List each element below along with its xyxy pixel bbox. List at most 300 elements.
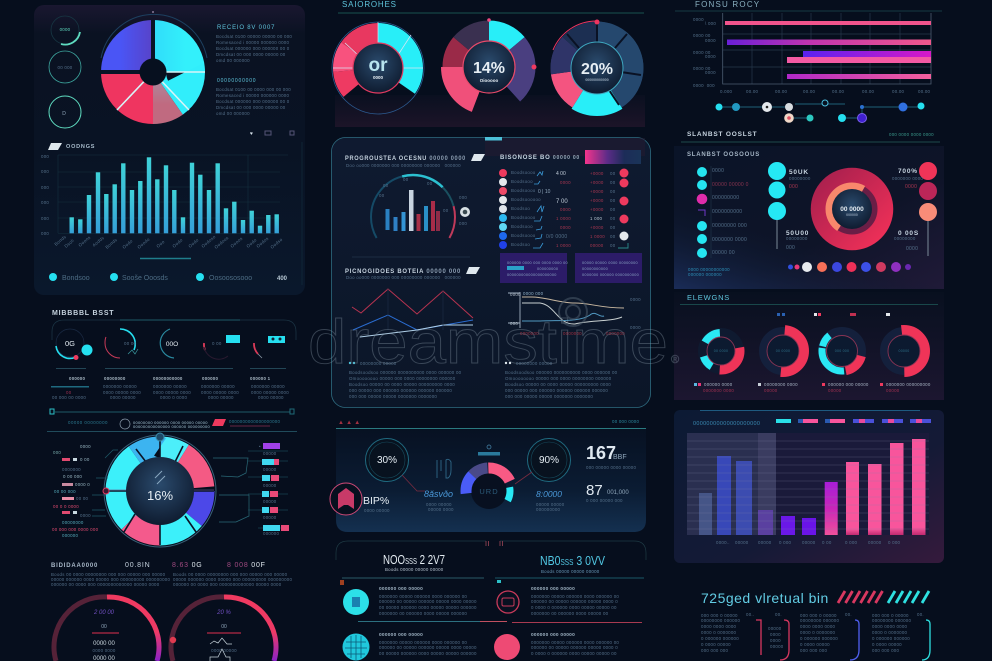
donut: 20%: 000000000000 (585, 78, 609, 82)
text block: Bocdsat 0100 00 0000 000 00 000 (216, 87, 291, 92)
donut: or (332, 22, 424, 114)
right labels: 00000 (263, 451, 277, 456)
panel: vertical bar chart (674, 410, 944, 563)
chart axis labels: 0000 000 (523, 291, 544, 296)
x labels: 00000 (735, 540, 749, 545)
teal bar chart: Bonds (104, 237, 119, 250)
x labels: 00000 (758, 540, 772, 545)
item 4: 000000 00 00000 000000 00000 0000 0 (531, 645, 618, 650)
text columns: 00. (917, 612, 924, 617)
text block: Dmcdsat 00 000 0000 00000 00 (216, 105, 286, 110)
stats: 001,000 (607, 490, 629, 496)
donut: 20%: 20% (581, 61, 613, 78)
teal bar chart: Bonds (53, 234, 68, 247)
left labels: 0 00 (80, 457, 90, 462)
cyan column: 000 (786, 245, 795, 251)
legend row: 400 (277, 276, 288, 282)
donut URD: URD (479, 487, 499, 496)
list of metrics: +0000 (590, 225, 604, 230)
list of metrics: +0000 (590, 207, 604, 212)
gauge captions (51, 368, 289, 400)
item 1: 000000 000 00000 (379, 586, 423, 592)
stats: 8:0000 (536, 489, 562, 499)
list of metrics: Boodsoooo (511, 233, 536, 238)
chart axis labels: 0000 (630, 297, 641, 302)
panel: horizontal bars: 00.00 (746, 89, 759, 94)
right column: 0000000 0000 (892, 176, 923, 181)
left labels: 0000000 (62, 467, 81, 472)
right column: 00000000 (894, 236, 916, 241)
plot background (687, 433, 929, 535)
left labels: 0000 0 (75, 482, 90, 487)
band: donut row background (335, 95, 645, 127)
arc gauge left: 2 00 00 (93, 610, 115, 616)
item 2: 0000000 00000 000000 0000 000000 00 (531, 594, 619, 599)
semicircle gauge: 00 (443, 208, 449, 213)
teal bar chart: 000 (41, 216, 49, 221)
panel: pie and bar dashboard (34, 5, 305, 295)
right column: 700% (898, 168, 918, 175)
chart axis labels: 0000000 (520, 331, 539, 336)
heading right: NB0SSS 3 0VV (540, 553, 605, 568)
stats: 000000000 (536, 507, 561, 512)
left labels (52, 444, 118, 538)
right labels: • (259, 444, 261, 449)
list of metrics: 4 00 (556, 171, 566, 177)
ring gauges: D (62, 111, 66, 117)
donut captions: 000000 0000 (704, 382, 733, 387)
legend row: Sooše Ooosds (122, 275, 168, 282)
text pair: 8.63 0G (172, 562, 203, 569)
icon: cutlery (437, 459, 451, 478)
ring gauges: 00 000 (58, 65, 73, 70)
list of metrics: Boodsoo (511, 206, 530, 211)
text block: omd 00 000000 (216, 58, 250, 63)
list of metrics: 00 (610, 225, 616, 230)
panel: bottom center KPI: 00 000 0000 (612, 419, 639, 424)
gauge captions: 000000 (202, 376, 218, 381)
list of metrics: +0000 (590, 171, 604, 176)
teal bar chart: Oodo (171, 237, 184, 249)
footer text left: 000 000 00000 00000 0000000 0000000 (349, 394, 437, 399)
gauge captions: 0000000 00000 (251, 384, 285, 389)
teal bar chart: Oodo (245, 237, 258, 249)
left labels: 00 000 000 0000 000 (52, 527, 99, 532)
arc gauge right: 20 % (216, 610, 231, 616)
x labels: 00000 (802, 540, 816, 545)
list of metrics: 00 (610, 180, 616, 185)
panel: horizontal bars: 0000 (705, 54, 716, 59)
big donut: 00 0000 (840, 206, 864, 213)
teal bar chart: Oodo (121, 238, 134, 250)
heading: top center: SAIOROHES (342, 0, 397, 9)
watermark: dreamstime (308, 308, 668, 377)
text pair: BIDIDAA0000 (51, 563, 98, 569)
gauge captions: 0000 00000 0000 (153, 390, 191, 395)
gauge captions: 000000 1 (250, 376, 271, 381)
panel: horizontal bars: 0000 (693, 17, 704, 22)
purple callouts: 000000000000000000000 (507, 273, 557, 277)
gauge captions: 0000 00000 (110, 395, 136, 400)
left labels: 000 (53, 450, 61, 455)
panel: horizontal bars: 0000 00 (693, 50, 711, 55)
item 2: 0000000 00 000000 0000 00000 00 (531, 611, 609, 616)
panel: lower left gauges: 0 00 (212, 341, 222, 346)
left legend: 00000 00 (712, 250, 735, 256)
donut captions (694, 382, 931, 393)
left legend: 000000000 (712, 195, 739, 201)
text block: Bocdsat 000000 000 000000 00 0 (216, 99, 290, 104)
teal bar chart: Oooos (229, 235, 244, 249)
right labels: 000000 (263, 531, 279, 536)
panel: four donuts: ELEWGNS (687, 293, 730, 302)
ring gauges (49, 16, 81, 128)
text pair: 000000 00 0000 000 0000000000000 00000 0000 (51, 582, 160, 587)
watermark: ® (671, 354, 679, 366)
cyan column: 00000000 (789, 176, 811, 181)
text block (216, 25, 292, 116)
small icons (250, 131, 294, 137)
divider with markers: 000000000000000 000000 000000000 (133, 424, 210, 429)
list of metrics: 0000 (560, 207, 571, 212)
item 4: 0 0000 0 000000 0000 00000 00000 00 (531, 651, 617, 656)
list of metrics: 00 (610, 207, 616, 212)
panel: bottom center split (336, 541, 646, 660)
footer text left: Omoooooooo 00000 000 0000 00000000 000000 (349, 376, 456, 381)
left legend: 00000 00000 0 (712, 182, 749, 188)
item 4 (494, 632, 619, 660)
heading left: NOOSSS 2 2V7 (383, 552, 445, 567)
right column: 0000 (906, 246, 918, 252)
text columns: 0000 0 0000000 (872, 630, 908, 635)
item 1 (343, 586, 477, 616)
stats (424, 443, 636, 512)
text pair: Boods 00 0000 00000000 000 000 00000 000 00000 (173, 572, 288, 577)
panel: horizontal bars: 0000 (705, 70, 716, 75)
text columns: 000 000 0 00000 (872, 613, 909, 618)
panel: horizontal bars: FONSU ROCY (695, 0, 760, 9)
footer text left (349, 361, 462, 399)
heading left (340, 552, 484, 585)
gauge captions: 0000 0 0000 (160, 395, 187, 400)
bars (699, 439, 926, 535)
teal bar chart: Oodos (255, 235, 270, 249)
item 4: 000000 000 00000 (531, 632, 575, 638)
divider with markers (47, 409, 297, 432)
x labels: 0 000 (888, 540, 901, 545)
heading left lower: Doo oo000 0000000 000 00000000 000000 000000 (346, 275, 461, 280)
donut 2: 00 0000 (776, 349, 790, 353)
gauge captions: 0000 00000 (258, 395, 284, 400)
panel: lower left gauges (47, 310, 297, 661)
line chart right (508, 292, 624, 328)
list of metrics: Boodsooo (511, 224, 533, 229)
left legend: 0000000 0000 (712, 237, 747, 243)
text columns: 0 000000 000000 (701, 636, 739, 641)
panel: horizontal bars (675, 0, 942, 94)
donut: 14% (453, 18, 536, 103)
gauge captions: 0000 00000 0000 (103, 390, 141, 395)
teal bar chart: Oodso (269, 237, 284, 250)
panel: horizontal bars: 00.00 (803, 89, 816, 94)
item 2 (497, 586, 619, 616)
heading: right panel 2: 000 0000 0000 0000 (889, 132, 934, 137)
gauge captions: 00000000 (104, 376, 126, 381)
list of metrics: Boodsoooo (511, 215, 536, 220)
ring gauges: 0000 (60, 27, 71, 32)
heading left lower: PICNOGIDOES BOTEIA 00000 000 (345, 268, 461, 275)
item 3: 000000 000 00000 (379, 632, 423, 638)
purple callouts: 000000000 (537, 267, 558, 271)
text columns: 00000000 000000 (872, 618, 911, 623)
text columns: 0 000000 000000 (800, 636, 838, 641)
footer text right: Omoooooooo 00000 000 0000 00000000 000000 (505, 376, 612, 381)
left labels: 00 0 0 0000 (53, 504, 79, 509)
arc gauge right: 0000 00000 (211, 648, 237, 653)
text block: Romesaced i 00000 000000 0000 (216, 93, 289, 98)
chart axis labels (510, 291, 641, 336)
heading left lower (345, 257, 480, 280)
legend row (49, 273, 288, 282)
large donut 16% (103, 433, 216, 547)
text pair: 00.8IN (125, 562, 150, 569)
arc gauge right: 00 (221, 624, 227, 630)
slash decoration (838, 591, 929, 603)
colour dots row (788, 262, 911, 272)
gauge captions: 00 (66, 390, 72, 395)
donut: or: 0000 (373, 75, 384, 80)
text columns: 0 0000 00000 (872, 642, 902, 647)
semicircle gauge: 00 (427, 181, 433, 186)
teal bar chart: Oodoso (200, 234, 217, 249)
donut captions: 00000000 0000 (764, 382, 798, 387)
footer text left: 000 00000 000 000000 000000 000000 000000 (349, 388, 452, 393)
text pair: 00000 000000 0000 00000 000 000000000 000000000 (173, 577, 292, 582)
chart heading: OODNGS (66, 144, 95, 150)
purple callouts (500, 253, 642, 283)
text columns: 000 000 0 00000 (701, 613, 738, 618)
cyan column: 50U00 (786, 230, 809, 237)
donut 1: 00 0000 (714, 349, 728, 353)
item 3: 0000000 00000 000000 0000 000000 00 (379, 640, 467, 645)
arc gauge right (170, 597, 276, 661)
gauge captions: 000000 (69, 376, 85, 381)
footer text right: Boodsoo 00000 00 0000 00000 000000000 0000 (505, 382, 611, 387)
teal bar chart: 000 (41, 169, 49, 174)
circle 90% (515, 438, 570, 484)
teal bar chart: Aodds (91, 235, 106, 248)
text columns: 00000000 000000 (701, 618, 740, 623)
text columns: 0000 0000 0000 (800, 624, 836, 629)
gauge captions: 0000000 00000 (103, 384, 137, 389)
text pair: Boods 00 0000 00000000 000 000 00000 000 00000 (51, 572, 166, 577)
cyan column: 50UK (789, 169, 809, 176)
text columns: 000 000 0 00000 (800, 613, 837, 618)
text columns (701, 612, 930, 660)
heading left: Boods 00000 00000 00000 (385, 567, 444, 572)
item 1: 000000 00 00000 000000 00000 0000 00000 (379, 599, 477, 604)
purple callouts: 00000000000 (582, 267, 608, 271)
list of metrics (499, 168, 628, 249)
pink badge: 0000 00000 (364, 508, 390, 513)
list of metrics: 00 (610, 189, 616, 194)
panel: horizontal bars: 00.00 (775, 89, 788, 94)
teal bar chart: 000 (41, 200, 49, 205)
list of metrics: 00 (610, 243, 616, 248)
panel: lower left gauges: 00O (166, 341, 178, 348)
text block: Romesaced i 00000 000000 0000 (216, 40, 289, 45)
donut captions: 0000000 000000000 (886, 382, 931, 387)
panel: central dashboard (332, 137, 650, 408)
list of metrics: 0000 (560, 180, 571, 185)
pink badge: BIP% (363, 495, 389, 507)
stats: 000 00000 0000 00000 (586, 465, 636, 470)
panel: lower left gauges: 0G (65, 339, 75, 348)
arc gauge left: 0000 00 (93, 641, 116, 647)
stats: 00000 0000 (428, 507, 454, 512)
big donut (819, 176, 885, 242)
footer text right: 00000000 00000 (516, 361, 553, 366)
chart axis labels: 0000 (510, 292, 521, 297)
item 3: 00 00000 000000 0000 00000 00000 000000 (379, 651, 477, 656)
text columns: 0000 (770, 632, 781, 637)
donut: 20% (551, 20, 643, 114)
heading right (500, 150, 641, 164)
list of metrics: 1 0000 (590, 234, 605, 239)
gauge row (56, 329, 262, 360)
donut captions: 000000 000 00000 (828, 382, 869, 387)
circle 30% (366, 438, 425, 491)
list of metrics: +0000 (590, 198, 604, 203)
line chart left (352, 289, 473, 337)
donut captions: 0000000 0000 (703, 388, 734, 393)
panel: bottom center KPI: ▲ ▲ ▲ (338, 420, 360, 426)
teal bar chart: 000 (41, 154, 49, 159)
pie chart (101, 11, 207, 110)
text block: omd 00 000000 (216, 111, 250, 116)
right labels: 00000 (263, 467, 277, 472)
cyan column (768, 162, 811, 251)
x labels: 0 00 (822, 540, 832, 545)
circle 30%: 30% (377, 455, 397, 466)
panel: horizontal bars: 00.00 (832, 89, 845, 94)
gauge captions: 0000 00000 (208, 395, 234, 400)
panel: horizontal bars: \ 000 (705, 21, 716, 26)
list of metrics: 00 (610, 171, 616, 176)
donut captions: 00000 (828, 388, 842, 393)
left legend: 0000000000 (712, 209, 742, 215)
donut 1 (703, 333, 739, 369)
text columns: 0 0000 00000 (800, 642, 830, 647)
cyan column: 00000000 (786, 236, 808, 241)
donut 3: 000 000 (835, 349, 849, 353)
connector dots (716, 100, 924, 123)
left legend (688, 166, 749, 277)
donut: 14%: Oiooooo (480, 78, 498, 83)
semicircle gauge: 000 (459, 195, 467, 200)
stats: 167 (586, 443, 616, 463)
semicircle gauge: 00 (379, 193, 385, 198)
stats: 87 (586, 482, 603, 499)
semicircle gauge: 00 (403, 177, 409, 182)
teal bar chart: Dsoli (63, 238, 75, 249)
text columns: 0 0000 00000 (701, 642, 731, 647)
right labels (213, 443, 289, 536)
text columns: 00000 (768, 626, 782, 631)
heading left: Doo oo000 0000000 000 00000000 000000 000000 (346, 163, 461, 168)
list of metrics: Boodsooo (511, 179, 533, 184)
text block: Bocdsat 000000 000 000000 00 0 (216, 46, 290, 51)
item 2: 0 0000 0 000000 0000 00000 00000 00 (531, 605, 617, 610)
purple callouts: 00000 00000 0000 00000000 (582, 261, 638, 265)
heading left (345, 154, 485, 168)
heading right: BISONOSE BO 00000 00 (500, 154, 580, 161)
text columns: 0000 0000 0000 (701, 624, 737, 629)
chart heading (48, 143, 95, 150)
x labels: 0000.. (716, 540, 730, 545)
stats: 8ăsvðo (424, 489, 453, 499)
right column: 0000 (905, 184, 917, 190)
pink badge (330, 483, 390, 515)
footer text left: 00000000 00000 (360, 361, 397, 366)
list of metrics: +0000 (590, 180, 604, 185)
legend row: Bondsoo (62, 275, 90, 282)
donut captions: 00000 (886, 388, 900, 393)
teal bar chart: 000 (41, 231, 49, 236)
panel: bottom center KPI (330, 419, 646, 532)
divider with markers: 00000 00000000 (68, 420, 108, 425)
panel: bottom right title and text (701, 590, 930, 660)
text columns: 0 000000 000000 (872, 636, 910, 641)
text block: Dmcdsat 00 000 0000 00000 00 (216, 52, 286, 57)
left legend: 00000000 000 (712, 223, 747, 229)
donut 2 (764, 332, 802, 370)
x labels: 0 000 (845, 540, 858, 545)
gauge captions: 00000000000 (153, 376, 183, 381)
list of metrics: 00000 (590, 243, 604, 248)
list of metrics: 00 (610, 198, 616, 203)
right labels: 00000 (263, 499, 277, 504)
text columns: 00000000 000000 (800, 618, 839, 623)
text columns: 00. (775, 612, 782, 617)
text columns: 0000 0 0000000 (701, 630, 737, 635)
divider with markers: 00000000 000000 0000 00000 00000 (133, 420, 208, 425)
item 2: 000000 00 00000 000000 00000 0000 0 (531, 599, 618, 604)
item 3: 000000 00 00000 000000 00000 0000 00000 (379, 645, 477, 650)
semicircle gauge: 000 (459, 221, 467, 226)
big donut: 000000 (846, 213, 858, 217)
footer text right: 000 000 00000 00000 0000000 0000000 (505, 394, 593, 399)
item 1: 0000000 00 000000 0000 00000 000000 (379, 611, 467, 616)
gauge captions: 0000 00000 0000 (251, 390, 289, 395)
list of metrics: 0/0 0000 (546, 234, 567, 240)
panel: horizontal bars: 0000 00 (693, 33, 711, 38)
footer text left: Boodsoo 00000 00 0000 00000 000000000 0000 (349, 382, 455, 387)
list of metrics: 1 000 (590, 216, 603, 221)
text block: Bocdsat 0100 00000 00000 00 000 (216, 34, 292, 39)
circle 90%: 90% (539, 455, 559, 466)
panel: horizontal bars: 00.00 (862, 89, 875, 94)
chart axis labels: 000 (510, 321, 518, 326)
teal bar chart: Oodoos (213, 235, 230, 250)
panel: vertical bar chart: 00000000000000000000 (693, 421, 760, 427)
left labels: 0000 (80, 444, 91, 449)
purple callouts: 0000000 000000 0000000000 (582, 273, 639, 277)
text columns: 0000 0000 0000 (872, 624, 908, 629)
footer text left: Boodsoodsoo 000000 0000000000 0000 000000 00 (349, 370, 462, 375)
text pair: 000000 00 0000 000 0000000000000 00000 0000 (173, 582, 282, 587)
item 1: 0000000 00000 000000 0000 000000 00 (379, 594, 467, 599)
